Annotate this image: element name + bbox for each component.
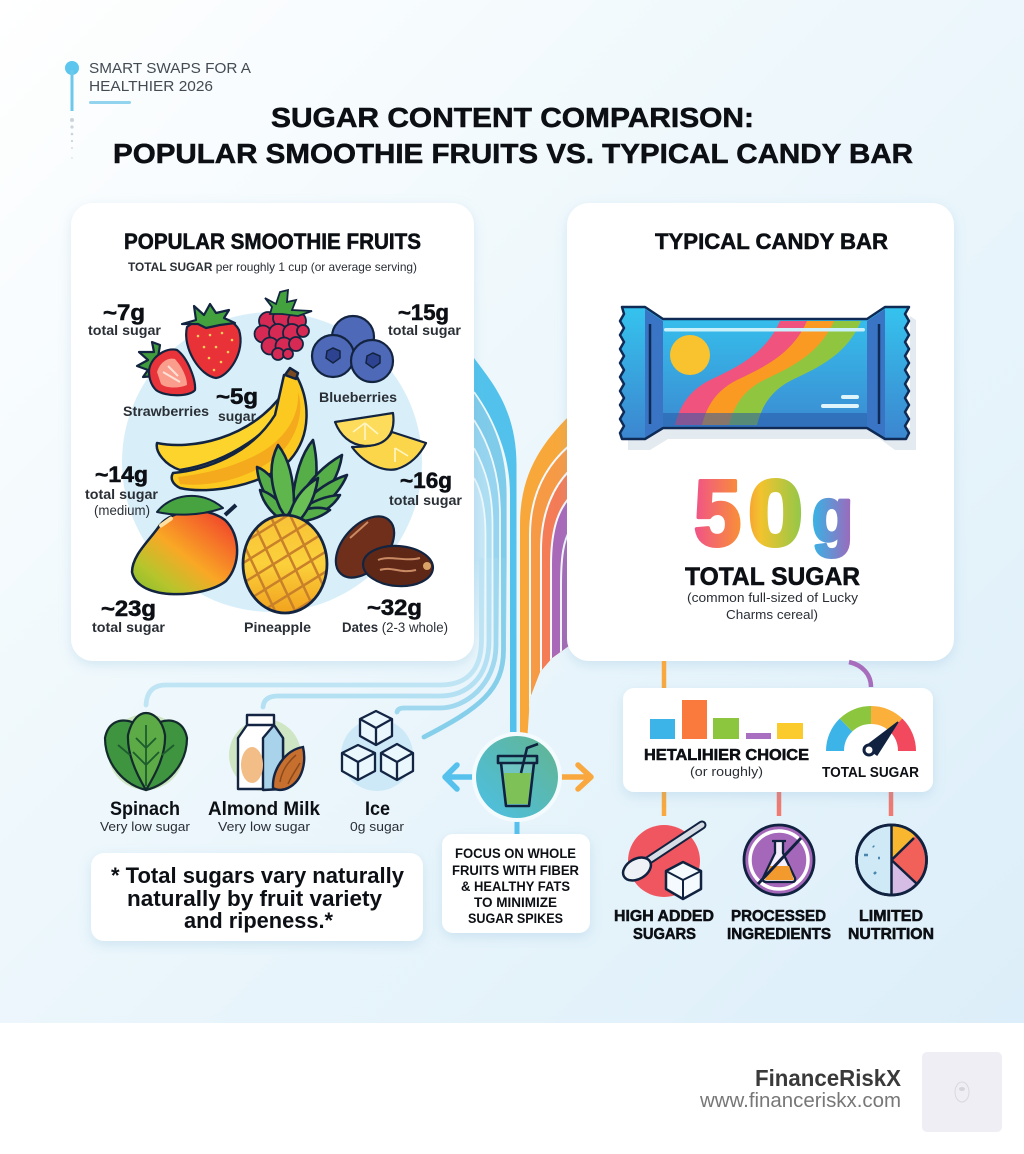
label: almond milk	[208, 799, 320, 834]
label: limited nutrition	[848, 908, 934, 943]
logo placeholder	[922, 1052, 1002, 1132]
label: dates sugar: ~32g	[367, 595, 422, 620]
callout: whole fruits advice: SUGAR SPIKES	[468, 911, 563, 926]
orange and purple flow ribbons	[520, 415, 570, 740]
panel: healthier choice chart and gauge	[623, 688, 933, 792]
label: mango sugar	[92, 596, 166, 635]
heading: smoothie fruits: POPULAR SMOOTHIE FRUITS	[124, 229, 421, 254]
panel: popular smoothie fruits	[71, 203, 474, 685]
label: mango sugar: total sugar	[92, 619, 166, 635]
label: strawberries sugar: ~7g	[103, 300, 145, 325]
callout: whole fruits advice: FOCUS ON WHOLE	[455, 846, 576, 861]
icon: lemon wedges	[335, 413, 426, 470]
icon: candy bar wrapper	[620, 307, 916, 450]
label: banana sugar: ~14g	[95, 462, 148, 487]
label: processed ingredients	[727, 908, 831, 943]
fruit backdrop circle	[122, 312, 422, 612]
note: cereal comparison: (common full-sized of Lucky	[687, 591, 859, 605]
big number: 50g: 5	[694, 461, 741, 565]
icon: mango	[132, 496, 237, 594]
label: ice: Ice	[365, 799, 390, 820]
tagline block: SMART SWAPS FOR A	[89, 60, 251, 77]
label: high added sugars: SUGARS	[633, 926, 696, 943]
label: ice: 0g sugar	[350, 819, 405, 834]
icon: pineapple	[242, 438, 348, 614]
callout: whole fruits advice: FRUITS WITH FIBER	[452, 863, 579, 878]
icon: blueberries	[312, 316, 393, 382]
icon: processed ingredients	[744, 825, 814, 895]
label: almond milk: Almond Milk	[208, 799, 320, 820]
label: dates sugar: Dates (2-3 whole)	[342, 619, 448, 635]
label: banana sugar	[85, 462, 159, 518]
label: strawberries sugar: total sugar	[88, 322, 162, 338]
footer brand	[699, 1065, 902, 1112]
heading: candy bar: TYPICAL CANDY BAR	[655, 229, 888, 254]
callout: sugar variation note	[91, 853, 423, 941]
label: mango sugar: ~23g	[101, 596, 156, 621]
note: cereal comparison: Charms cereal)	[726, 608, 818, 622]
icon: limited nutrition	[856, 825, 926, 895]
label: high added sugars	[614, 908, 714, 943]
footer brand: www.financeriskx.com	[699, 1090, 901, 1112]
gauge	[835, 715, 907, 755]
footer brand: FinanceRiskX	[755, 1065, 902, 1091]
label: ice	[350, 799, 405, 834]
big number: 50g: g	[812, 473, 853, 558]
title: SUGAR CONTENT COMPARISON:	[271, 102, 754, 133]
label: pineapple: Pineapple	[244, 619, 311, 635]
callout: whole fruits advice: TO MINIMIZE	[474, 895, 557, 910]
callout: whole fruits advice: & HEALTHY FATS	[461, 879, 570, 894]
panel: typical candy bar	[567, 203, 954, 661]
bar chart	[650, 700, 803, 739]
tagline block: HEALTHIER 2026	[89, 78, 213, 95]
label: blueberries: Blueberries	[319, 389, 397, 405]
label: banana sugar: (medium)	[94, 503, 150, 518]
label: limited nutrition: NUTRITION	[848, 926, 934, 943]
label: high added sugars: HIGH ADDED	[614, 908, 714, 925]
label: citrus sugar: total sugar	[389, 492, 463, 508]
callout: sugar variation note: naturally by fruit variety	[127, 886, 383, 911]
icon: dates	[325, 506, 434, 588]
icon: raspberry	[254, 290, 312, 360]
big number: 50g	[694, 461, 853, 565]
icon: ice cubes	[341, 711, 413, 791]
tagline block	[65, 60, 251, 159]
icon: spinach	[105, 713, 187, 790]
chart label: HETALIHIER CHOICE	[644, 747, 809, 764]
label: raspberries sugar: ~5g	[216, 384, 258, 409]
label: raspberries sugar	[216, 384, 258, 424]
icon: smoothie hub with arrows	[445, 732, 591, 834]
label: dates sugar	[342, 595, 448, 635]
label: blueberries sugar	[388, 300, 462, 338]
gauge label: TOTAL SUGAR	[822, 765, 919, 781]
title: POPULAR SMOOTHIE FRUITS VS. TYPICAL CANDY BAR	[113, 138, 913, 169]
callout: sugar variation note: * Total sugars vary naturally	[111, 863, 405, 888]
footer band	[0, 1023, 1024, 1154]
icon: high added sugars	[619, 825, 702, 899]
label: banana sugar: total sugar	[85, 486, 159, 502]
chart label	[644, 747, 809, 779]
callout: sugar variation note: and ripeness.*	[184, 908, 333, 933]
icon: whole strawberry	[182, 304, 241, 378]
label: strawberries: Strawberries	[123, 403, 209, 419]
label: strawberries sugar	[88, 300, 162, 338]
blue flow ribbons	[146, 358, 516, 737]
label: spinach: Spinach	[110, 799, 180, 820]
title	[113, 102, 913, 169]
label: citrus sugar	[389, 468, 463, 508]
label: raspberries sugar: sugar	[218, 408, 257, 424]
label: spinach	[100, 799, 191, 834]
big number: 50g: 0	[748, 461, 803, 565]
callout: whole fruits advice	[442, 834, 590, 933]
subheading: TOTAL SUGAR per roughly 1 cup (or average serving)	[128, 260, 417, 274]
label: spinach: Very low sugar	[100, 819, 191, 834]
label: processed ingredients: INGREDIENTS	[727, 926, 831, 943]
label: total sugar: TOTAL SUGAR	[685, 563, 860, 591]
note: cereal comparison	[687, 591, 859, 622]
label: blueberries sugar: total sugar	[388, 322, 462, 338]
icon: almond milk	[229, 715, 304, 791]
label: limited nutrition: LIMITED	[859, 908, 923, 925]
label: almond milk: Very low sugar	[218, 819, 311, 834]
chart label: (or roughly)	[690, 764, 763, 779]
label: processed ingredients: PROCESSED	[731, 908, 826, 925]
icon: cut strawberry	[137, 342, 195, 395]
label: citrus sugar: ~16g	[400, 468, 452, 493]
label: blueberries sugar: ~15g	[398, 300, 449, 325]
icon: bananas	[157, 368, 307, 490]
connectors: candy panel to chart and icons	[664, 661, 891, 816]
